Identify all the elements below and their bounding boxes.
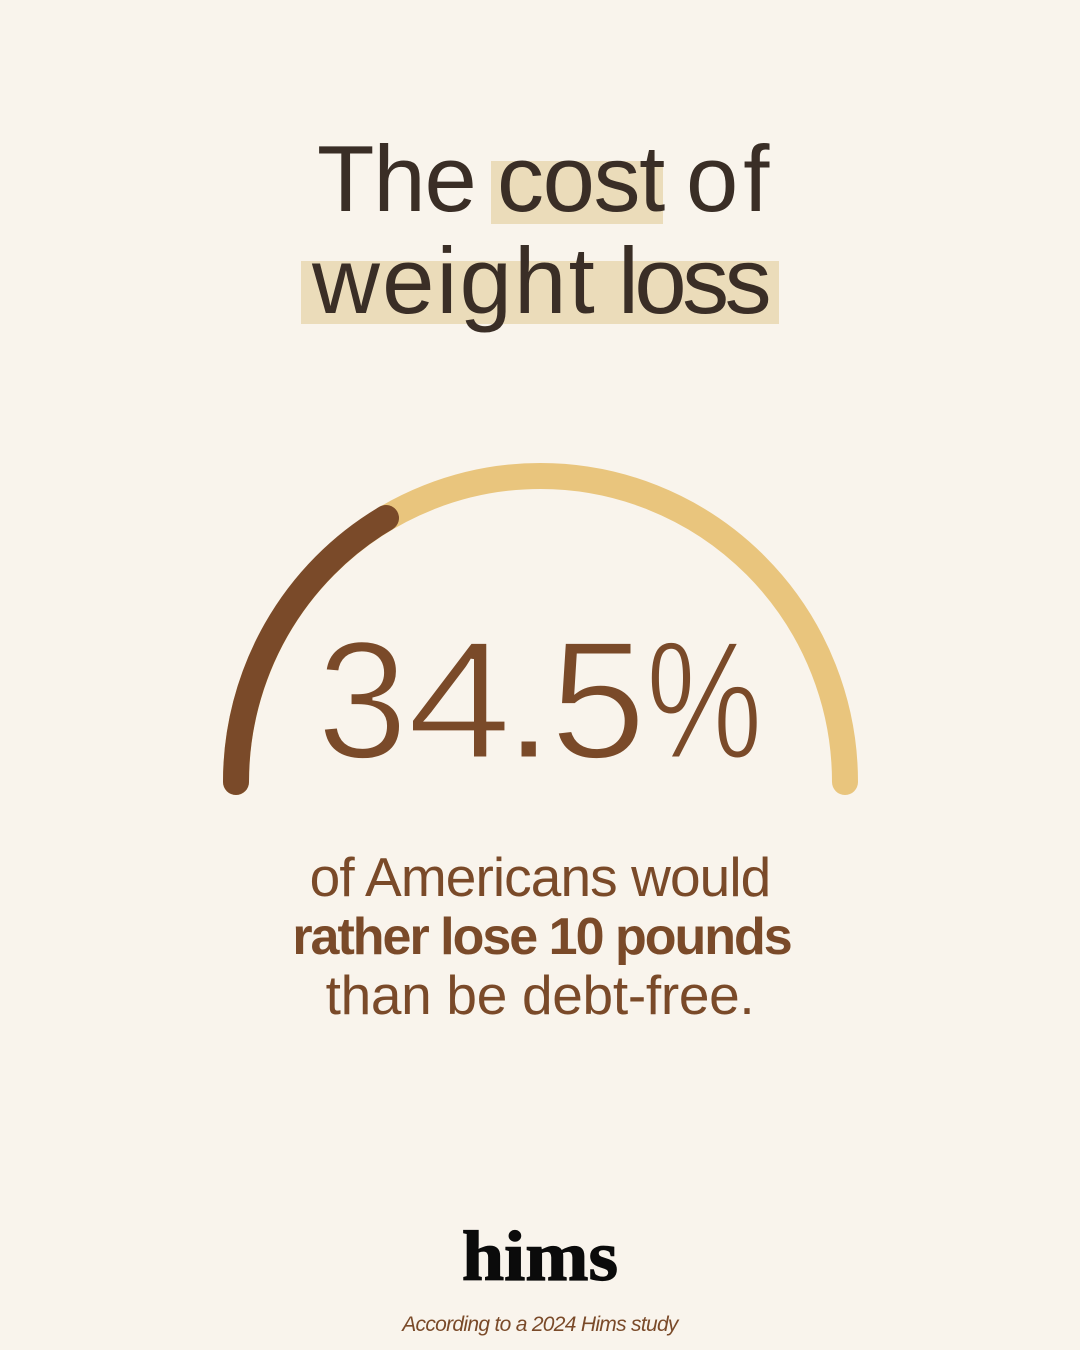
description: [292, 846, 791, 1026]
title line 2: loss: [618, 228, 767, 333]
description line 2: rather lose 10 pounds: [292, 908, 791, 966]
title line 1: of: [686, 126, 774, 231]
description line 3: than be debt-free.: [326, 964, 754, 1026]
source note: According to a 2024 Hims study: [402, 1313, 678, 1336]
gauge track: [236, 476, 845, 782]
percentage value: .: [503, 606, 554, 794]
percentage value: 3: [317, 606, 408, 794]
title: [301, 126, 779, 333]
percentage value: 5: [550, 606, 646, 794]
highlight: weight loss: [301, 261, 779, 324]
percentage value: [317, 606, 763, 794]
title line 2: [312, 228, 768, 333]
percentage value: 4: [407, 606, 512, 794]
percentage value: %: [646, 606, 763, 794]
title line 2: weight: [312, 228, 597, 333]
logo: hims: hims: [462, 1218, 618, 1296]
title line 1: cost: [497, 126, 664, 231]
title line 1: The: [317, 126, 476, 231]
title line 1: [317, 126, 774, 231]
gauge value arc: [236, 518, 386, 782]
description line 1: of Americans would: [310, 846, 770, 908]
highlight: cost: [491, 161, 663, 224]
